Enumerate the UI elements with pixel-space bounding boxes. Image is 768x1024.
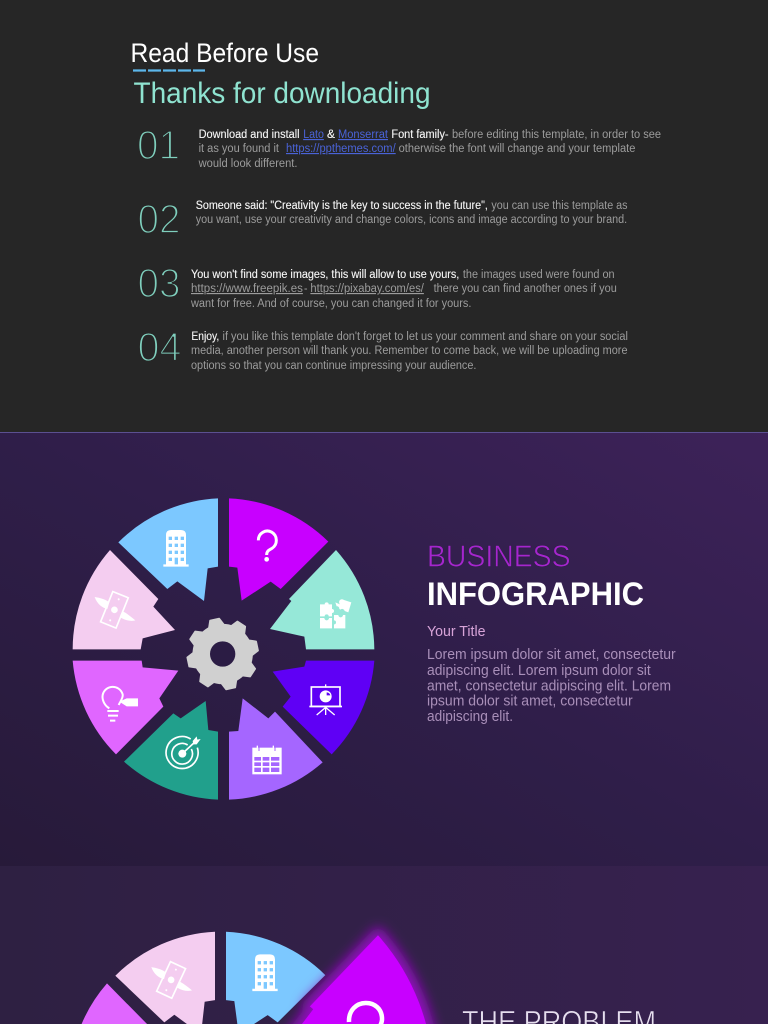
number 03: 03: [138, 260, 180, 306]
step 02 text: you want, use your creativity and change colors, icons and image according to your brand.: [196, 214, 627, 226]
icon: building: [163, 530, 189, 567]
chart: eight-segment gear wheel: [73, 498, 374, 800]
step 01 text: Lato: [303, 129, 324, 141]
step 02: [138, 196, 628, 242]
step 04 text: if you like this template don't forget to let us your comment and share on your social: [222, 331, 628, 343]
icon: puzzle pieces: [320, 599, 351, 628]
step 04 text: media, another person will thank you. Remember to come back, we will be uploading more: [191, 345, 628, 357]
panel: read before use background: [0, 0, 768, 432]
segment: building: [118, 498, 218, 601]
number 01: 01: [137, 122, 180, 168]
step 02 text: Someone said: "Creativity is the key to success in the future",: [196, 200, 488, 212]
body paragraph: amet, consectetur adipiscing elit. Lorem: [427, 678, 671, 694]
step 03 text: want for free. And of course, you can changed it for yours.: [190, 298, 471, 310]
step 02 text: you can use this template as: [491, 200, 628, 212]
step 03 text: -: [304, 283, 308, 295]
icon: flying money: [95, 592, 135, 628]
number 02: 02: [138, 196, 180, 242]
segment: calendar: [229, 698, 323, 800]
number 04: 04: [138, 324, 182, 370]
icon: central gear: [187, 618, 259, 690]
step 01 text: &: [327, 129, 335, 141]
panel: business infographic background: [0, 432, 768, 866]
icon: lightbulb with tag: [103, 687, 138, 721]
step 03 text: there you can find another ones if you: [434, 283, 617, 295]
icon: flying money: [151, 962, 192, 998]
segment: puzzle: [270, 550, 374, 649]
segment: highlighted question: [282, 935, 434, 1024]
step 01 text: https://ppthemes.com/: [286, 143, 396, 155]
step 04: [138, 324, 628, 372]
step 01 text: [198, 129, 661, 170]
subtitle: your title: Your Title: [427, 624, 486, 640]
heading: thanks for downloading: Thanks for downloading: [134, 77, 430, 110]
icon: question mark: [258, 531, 276, 562]
text: business infographic: [427, 538, 676, 725]
step 04 text: options so that you can continue impressing your audience.: [191, 360, 476, 372]
step 03 text: https://www.freepik.es: [191, 283, 303, 295]
segment: presentation: [273, 661, 374, 754]
body paragraph: [427, 647, 676, 725]
step 01 text: Font family-: [391, 129, 449, 141]
chart: second wheel with highlighted segment: [70, 932, 434, 1024]
step 01 text: it as you found it: [199, 143, 280, 155]
segment: question: [229, 498, 328, 601]
segment: building: [226, 932, 325, 1024]
step 04 text: Enjoy,: [191, 331, 219, 343]
step 03 text: You won't find some images, this will allow to use yours,: [191, 269, 459, 281]
heading: business: BUSINESS: [427, 538, 570, 574]
body paragraph: Lorem ipsum dolor sit amet, consectetur: [427, 647, 676, 663]
step 01 text: Download and install: [199, 129, 300, 141]
body paragraph: adipiscing elit.: [427, 709, 513, 725]
step 01: [137, 122, 661, 170]
icon: target with arrow: [166, 736, 201, 768]
heading: read before use: Read Before Use: [130, 38, 319, 68]
icon: building: [252, 954, 278, 991]
segment: flying money: [73, 550, 175, 649]
heading: infographic: INFOGRAPHIC: [427, 576, 644, 612]
icon: presentation board: [309, 684, 342, 715]
step 01 text: before editing this template, in order to see: [452, 129, 661, 141]
step 04 text: [191, 331, 628, 372]
segment: lightbulb: [70, 983, 172, 1024]
step 02 text: [196, 200, 628, 226]
step 03: [138, 260, 617, 310]
panel: the problem background: [0, 866, 768, 1024]
step 03 text: [190, 269, 617, 310]
segment: flying money: [115, 932, 215, 1024]
icon: large question mark: [349, 1003, 382, 1024]
icon: calendar: [252, 746, 282, 774]
step 01 text: would look different.: [198, 158, 298, 170]
step 01 text: otherwise the font will change and your template: [399, 143, 635, 155]
segment: highlight glow: [282, 935, 434, 1024]
step 01 text: Monserrat: [338, 129, 389, 141]
step 03 text: the images used were found on: [463, 269, 615, 281]
segment: target: [124, 701, 218, 800]
segment: lightbulb: [73, 661, 178, 754]
body paragraph: adipiscing elit. Lorem ipsum dolor sit: [427, 663, 651, 679]
step 03 text: https://pixabay.com/es/: [310, 283, 425, 295]
body paragraph: ipsum dolor sit amet, consectetur: [427, 694, 633, 710]
